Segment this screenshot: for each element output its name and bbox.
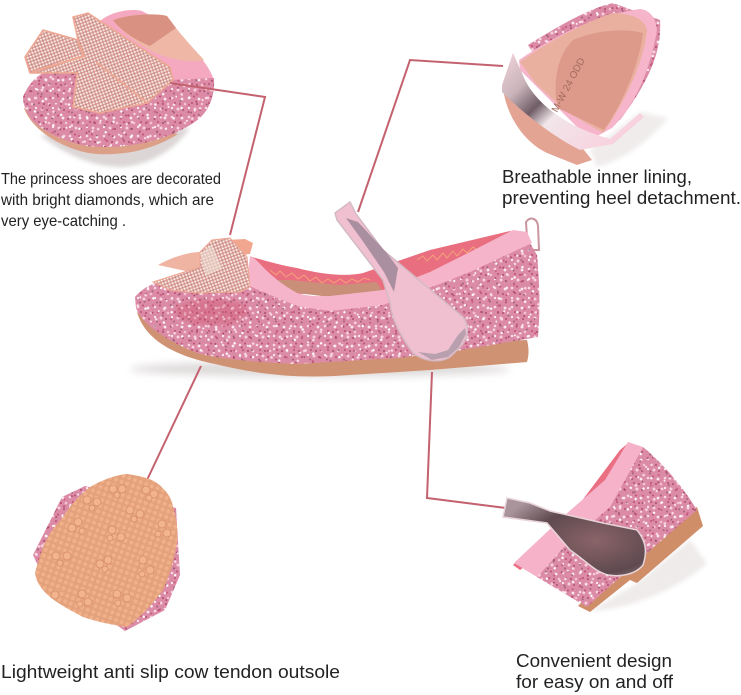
text: strap caption: Convenient design <box>516 651 672 671</box>
metallic strap <box>502 53 644 150</box>
heel leather <box>503 87 592 165</box>
text: strap caption: for easy on and off <box>516 672 674 692</box>
ground shadow <box>130 361 510 377</box>
rose shading on toe <box>176 299 248 325</box>
toe lining and rim <box>100 10 214 84</box>
leader line: outsole <box>147 366 201 480</box>
panel: bow detail close-up <box>23 10 214 167</box>
glitter edges <box>33 486 180 631</box>
heel shadow <box>590 112 668 167</box>
flower lugs <box>51 485 171 607</box>
text: bow caption: The princess shoes are decorated <box>1 171 221 188</box>
text: bow caption <box>0 171 221 230</box>
pink rim band <box>514 442 643 577</box>
forefoot shadow <box>590 540 707 611</box>
shoe interior <box>252 231 520 294</box>
toe bow <box>153 238 253 293</box>
text: lining caption <box>502 167 741 208</box>
panel: inner lining close-up <box>502 3 668 167</box>
dark metallic strap <box>503 498 645 576</box>
detail sole <box>578 507 703 612</box>
diamond bow <box>25 13 173 113</box>
metallic strap <box>335 202 467 361</box>
text: lining caption: preventing heel detachment. <box>502 188 741 208</box>
leader line: strap <box>427 372 545 513</box>
shadow under toe <box>40 128 190 167</box>
heel tab <box>526 219 539 250</box>
pink rim <box>519 9 657 140</box>
panel: strap close-up <box>503 442 707 612</box>
heel glitter edge <box>528 3 660 140</box>
text: lining caption: Breathable inner lining, <box>502 167 692 187</box>
detail glitter <box>537 447 697 607</box>
toe glitter <box>23 60 214 147</box>
interior sliver <box>513 444 627 570</box>
sole tread <box>35 474 177 627</box>
main shoe <box>130 202 539 377</box>
leader line: bow <box>170 83 265 235</box>
panel: outsole close-up <box>33 474 180 631</box>
size print: M-W 24 ODD <box>550 56 588 114</box>
text: outsole caption: Lightweight anti slip cow tendon outsole <box>1 662 340 682</box>
toe sole <box>24 108 178 154</box>
glitter upper <box>135 238 539 364</box>
outsole <box>137 312 528 377</box>
text: bow caption: with bright diamonds, which are <box>0 192 214 209</box>
lining <box>520 13 647 133</box>
elastic rim <box>247 230 532 311</box>
zigzag stitch <box>270 247 477 283</box>
text: strap caption <box>516 651 674 692</box>
leader line: lining <box>358 60 503 212</box>
text: bow caption: very eye-catching . <box>1 213 126 230</box>
